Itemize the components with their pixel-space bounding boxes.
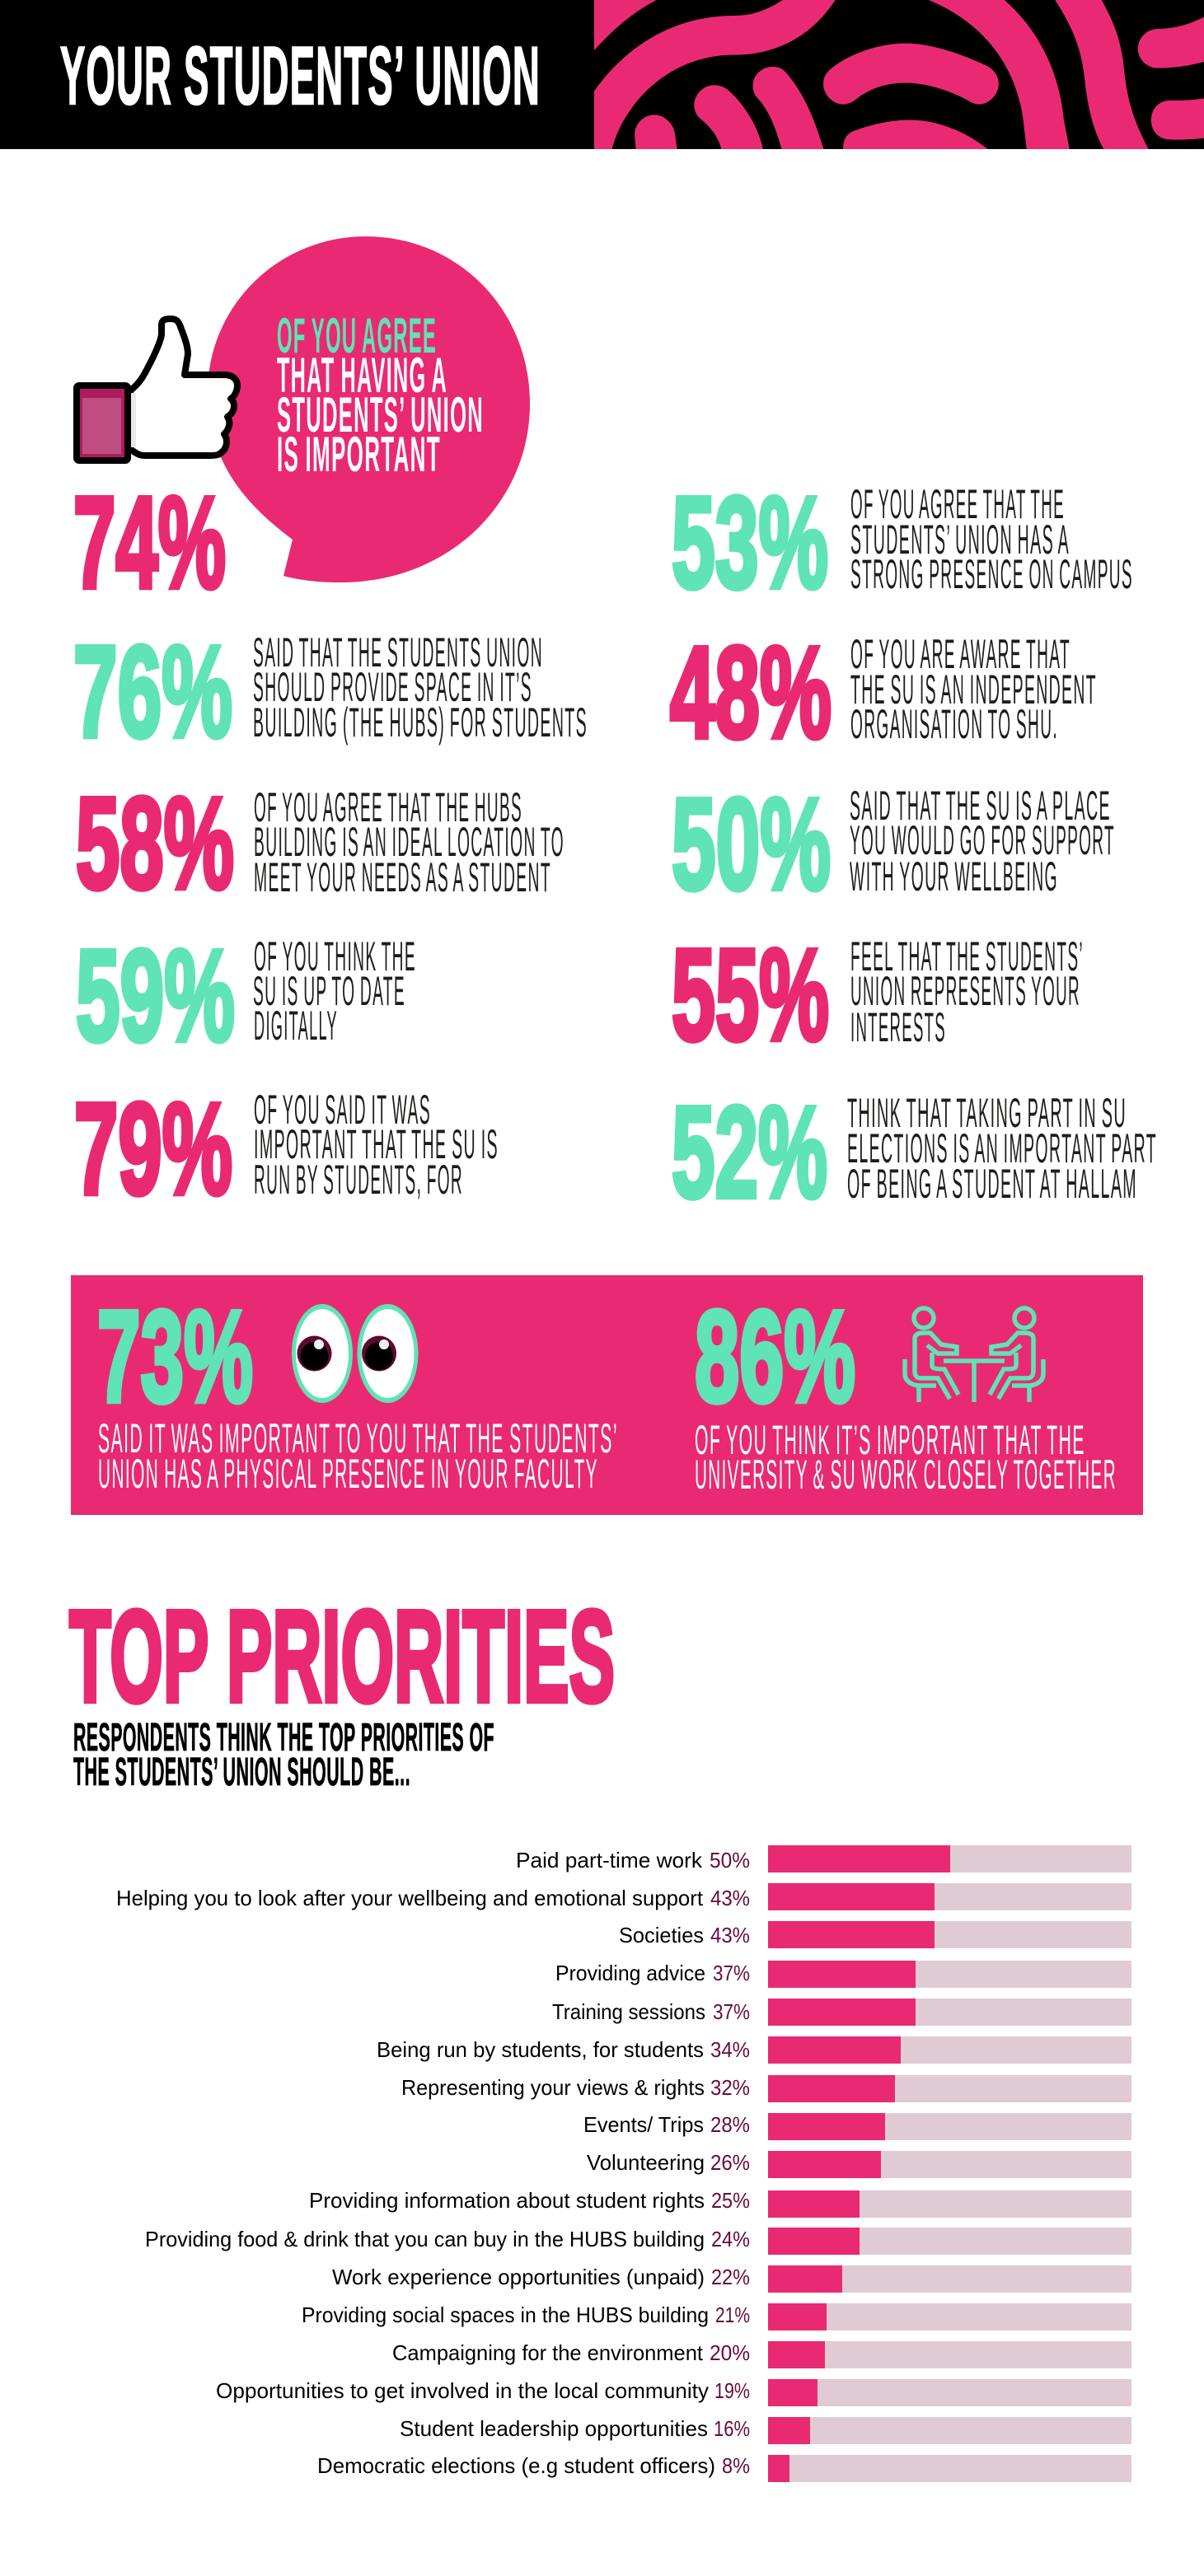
row: Providing information: Providing information about student rights <box>309 2188 705 2213</box>
stat row: 48% <box>670 620 1097 765</box>
row: Providing advice: 37% <box>713 1961 750 1985</box>
callout text: OF YOU AGREE <box>277 308 437 363</box>
row: Training sessions: 37% <box>713 1999 750 2024</box>
stat row: 58% <box>76 771 565 916</box>
row: Providing social spaces: 21% <box>715 2303 750 2327</box>
description <box>847 1090 1157 1207</box>
row: Providing information: 25% <box>711 2188 750 2213</box>
stat row: 58%: 58% <box>76 771 234 916</box>
row: Training sessions: Training sessions <box>552 1999 705 2024</box>
infographic page: OF YOU AGREE THAT THE HUBS <box>254 784 522 830</box>
row: Democratic elections <box>317 2453 1131 2482</box>
description <box>254 784 565 900</box>
row: Student leadership: 16% <box>714 2416 750 2441</box>
stat row: 52% <box>672 1080 1157 1225</box>
description <box>850 933 1084 1050</box>
icon: eyes <box>292 1304 419 1403</box>
infographic page: BUILDING (THE HUBS) FOR STUDENTS <box>253 699 588 746</box>
description <box>850 631 1097 747</box>
row: Student leadership: Student leadership opportunities <box>400 2416 708 2441</box>
header band: YOUR STUDENTS’ UNION <box>60 30 541 121</box>
speech bubble callout: STUDENTS’ UNION <box>277 387 484 442</box>
row: Events/ Trips <box>583 2112 1131 2140</box>
row: Paid part-time work <box>516 1845 1131 1872</box>
row: Representing your views <box>401 2075 1131 2102</box>
row: Providing advice: Providing advice <box>555 1961 705 1985</box>
row: Societies: 43% <box>710 1923 750 1947</box>
description <box>850 783 1115 900</box>
stat row: 79%: 79% <box>74 1077 232 1222</box>
row: Representing your views: 32% <box>710 2075 750 2100</box>
infographic page: MEET YOUR NEEDS AS A STUDENT <box>254 854 551 900</box>
description <box>850 481 1133 597</box>
row: Democratic elections: 8% <box>722 2453 750 2478</box>
row: Opportunities <box>216 2378 1131 2406</box>
stat: 73%: 73% <box>97 1284 253 1429</box>
speech bubble callout <box>208 236 530 582</box>
infographic page: OF YOU THINK THE <box>254 933 416 979</box>
row: Events/ Trips: 28% <box>710 2112 750 2137</box>
row: Helping you: 43% <box>710 1886 750 1910</box>
stat row: 79% <box>74 1077 499 1222</box>
row: Providing information <box>309 2188 1131 2218</box>
row: Campaigning <box>392 2340 1131 2368</box>
stat row: 50% <box>672 772 1115 917</box>
icon: thumbs up <box>77 319 237 461</box>
row: Providing social spaces: Providing social spaces in the HUBS building <box>302 2303 709 2327</box>
infographic page: RUN BY STUDENTS, FOR <box>254 1157 463 1203</box>
row: Volunteering <box>587 2150 1131 2178</box>
row: Opportunities: Opportunities to get involved in the local community <box>216 2378 709 2403</box>
row: Volunteering: Volunteering <box>587 2150 705 2175</box>
stat: 74%: 74% <box>73 470 226 615</box>
row: Helping you: Helping you to look after your wellbeing and emotional support <box>116 1886 704 1910</box>
description: DIGITALLY <box>254 1003 338 1049</box>
row: Opportunities: 19% <box>714 2378 750 2403</box>
row: Democratic elections: Democratic elections (e.g student officers) <box>317 2453 715 2478</box>
banner text left <box>98 1415 618 1497</box>
row: Paid part-time work: 50% <box>710 1848 750 1872</box>
infographic page: BUILDING IS AN IDEAL LOCATION TO <box>254 819 565 865</box>
row: Events/ Trips: Events/ Trips <box>583 2112 704 2137</box>
bar chart: priorities <box>116 1845 1131 2482</box>
row: Training sessions <box>552 1999 1131 2026</box>
row: Providing social spaces <box>302 2303 1131 2331</box>
row: Providing advice <box>555 1961 1131 1988</box>
description <box>254 1087 499 1203</box>
row: Work experience: Work experience opportunities (unpaid) <box>332 2265 705 2289</box>
header band <box>0 0 1204 149</box>
row: Work experience <box>332 2265 1131 2293</box>
infographic page: IMPORTANT THAT THE SU IS <box>254 1121 499 1167</box>
infographic page: SAID THAT THE STUDENTS UNION <box>253 629 543 676</box>
row: Being run by students: 34% <box>710 2037 750 2062</box>
stat row: 55%: 55% <box>672 923 829 1068</box>
stat row: 53% <box>672 470 1133 615</box>
stat row: 50%: 50% <box>672 772 831 917</box>
row: Providing food and drink: Providing food & drink that you can buy in the HUBS building <box>145 2227 705 2251</box>
callout text: THAT HAVING A <box>277 348 447 403</box>
row: Representing your views: Representing your views & rights <box>401 2075 705 2100</box>
row: Student leadership <box>400 2416 1131 2444</box>
stat row: 48%: 48% <box>670 620 832 765</box>
header pattern <box>594 0 1204 149</box>
subheading: THE STUDENTS’ UNION SHOULD BE... <box>73 1751 410 1794</box>
row: Societies: Societies <box>619 1923 704 1947</box>
row: Paid part-time work: Paid part-time work <box>516 1848 703 1872</box>
row: Campaigning: 20% <box>710 2340 750 2365</box>
infographic page: RESPONDENTS THINK THE TOP PRIORITIES OF <box>73 1716 494 1760</box>
banner text right <box>695 1417 1117 1498</box>
description <box>253 629 588 746</box>
stat: 86%: 86% <box>695 1284 855 1429</box>
callout text: IS IMPORTANT <box>277 427 441 482</box>
stat row: 52%: 52% <box>672 1080 827 1225</box>
stat row: 76% <box>73 619 588 764</box>
stat row: 76%: 76% <box>73 619 232 764</box>
row: Societies <box>619 1921 1131 1948</box>
row: Campaigning: Campaigning for the environment <box>392 2340 704 2365</box>
panel: pink banner <box>71 1275 1143 1515</box>
row: Providing food and drink: 24% <box>711 2227 750 2251</box>
infographic page: SHOULD PROVIDE SPACE IN IT’S <box>253 664 532 710</box>
row: Helping you <box>116 1883 1131 1910</box>
row: Work experience: 22% <box>711 2265 750 2289</box>
row: Volunteering: 26% <box>710 2150 750 2175</box>
description: OF YOU SAID IT WAS <box>254 1087 431 1133</box>
row: Being run by students: Being run by students, for students <box>377 2037 704 2062</box>
description: INTERESTS <box>850 1004 946 1050</box>
row: Providing food and drink <box>145 2227 1131 2255</box>
stat row: 53%: 53% <box>672 470 828 615</box>
stat row: 59%: 59% <box>76 923 235 1068</box>
subheading <box>73 1716 494 1794</box>
stat row: 55% <box>672 923 1084 1068</box>
infographic page: SU IS UP TO DATE <box>253 968 405 1014</box>
heading: top priorities: TOP PRIORITIES <box>69 1584 615 1729</box>
description <box>253 933 416 1049</box>
callout text <box>277 308 484 482</box>
row: Being run by students <box>377 2036 1131 2064</box>
icon: two people at a table <box>905 1308 1043 1402</box>
